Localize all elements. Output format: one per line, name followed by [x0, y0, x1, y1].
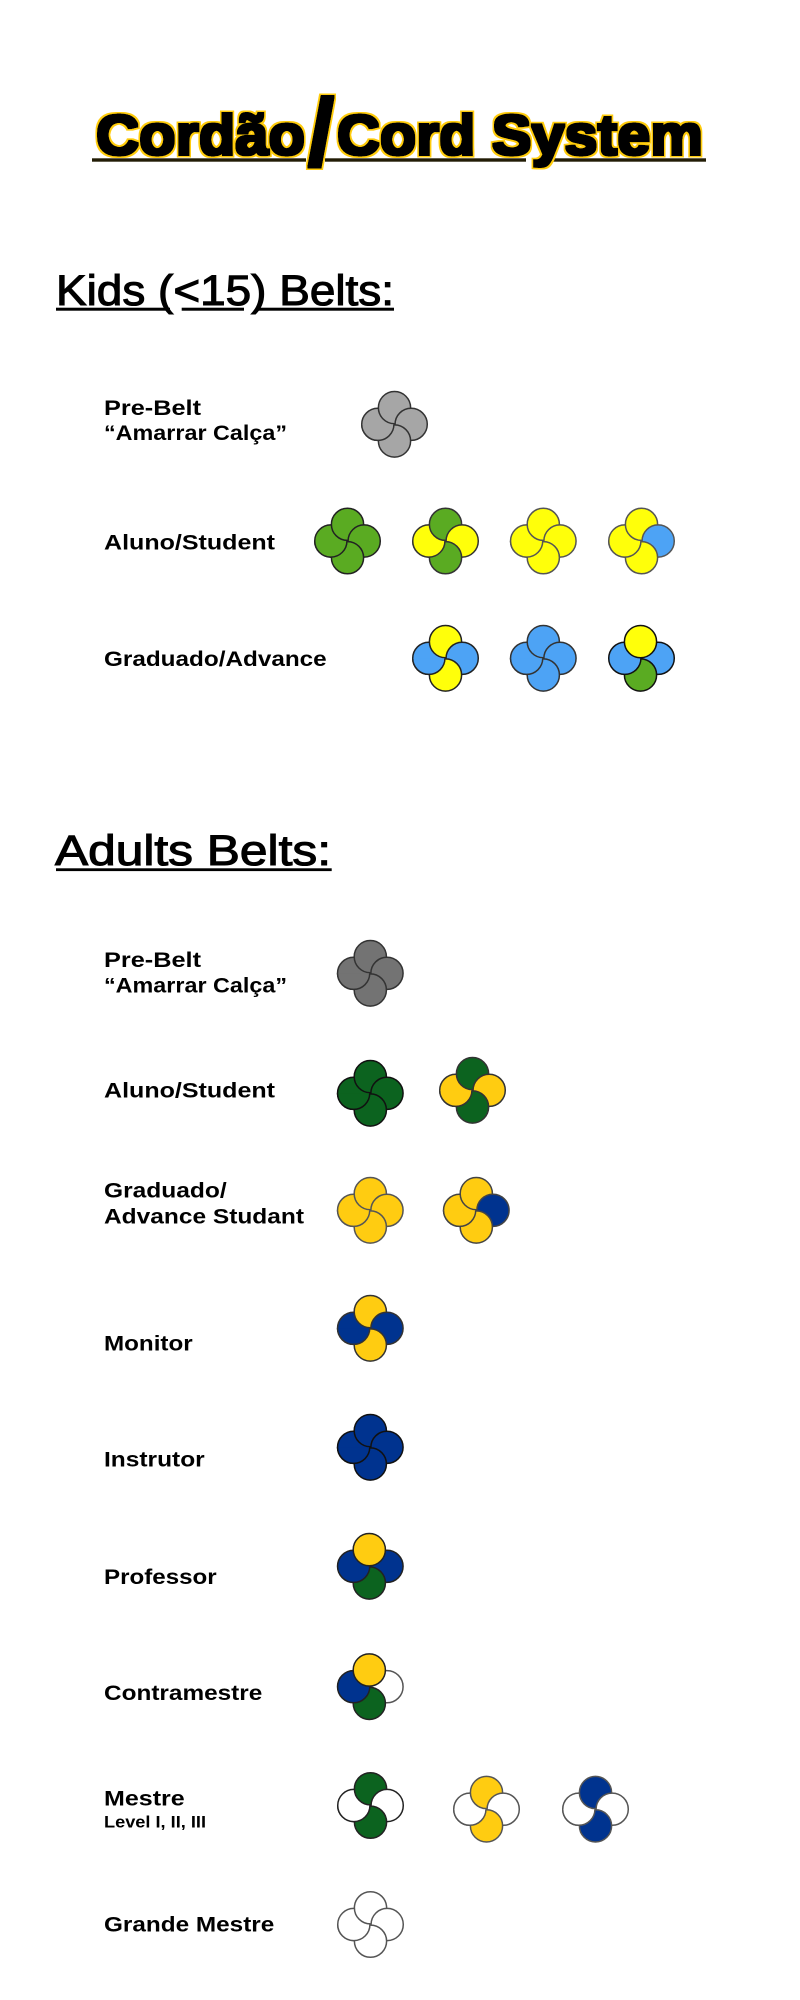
- label: adults graduado: Graduado/: [104, 1180, 227, 1203]
- knot: kids pre-belt grey: [362, 392, 427, 457]
- knot: mestre white and gold: [454, 1776, 519, 1842]
- knot: adults pre-belt dark grey: [338, 941, 403, 1006]
- label: contramestre: Contramestre: [104, 1682, 262, 1705]
- knot: kids green: [315, 508, 380, 574]
- knot: contramestre navy, gold, white and green: [338, 1654, 403, 1719]
- title: Cord System: [337, 104, 703, 168]
- knot: instrutor navy: [338, 1415, 403, 1480]
- knot: kids yellow: [511, 508, 576, 574]
- heading: kids belts: Kids (<15) Belts:: [56, 267, 394, 315]
- label: kids pre-belt: “Amarrar Calça”: [104, 422, 287, 445]
- knot: mestre white and navy: [563, 1776, 628, 1842]
- knot: kids yellow and green: [413, 508, 478, 574]
- knot: kids yellow and blue: [609, 508, 674, 574]
- label: adults pre-belt: Pre-Belt: [104, 949, 201, 972]
- knot: mestre white and green: [338, 1773, 403, 1838]
- knot: adults gold: [338, 1178, 403, 1243]
- knot: adults gold and green: [440, 1058, 505, 1123]
- knot: monitor navy and gold: [338, 1296, 403, 1361]
- label: grande mestre: Grande Mestre: [104, 1914, 274, 1937]
- label: kids pre-belt: Pre-Belt: [104, 397, 201, 420]
- knot: kids blue and yellow: [413, 626, 478, 691]
- label: mestre: Mestre: [104, 1787, 185, 1810]
- knot: professor navy, gold and green: [338, 1534, 403, 1599]
- label: adults pre-belt: [104, 949, 287, 998]
- title: Cordão: [96, 104, 305, 168]
- label: kids pre-belt: [104, 397, 287, 445]
- label: monitor: Monitor: [104, 1333, 193, 1356]
- label: adults graduado: [104, 1180, 304, 1228]
- label: adults graduado: Advance Studant: [104, 1205, 304, 1228]
- label: adults aluno: Aluno/Student: [104, 1080, 275, 1103]
- knot: adults green: [338, 1061, 403, 1126]
- label: instrutor: Instrutor: [104, 1449, 205, 1472]
- label: mestre: [104, 1787, 206, 1831]
- knot: kids blue, yellow and green: [609, 626, 674, 691]
- knot: adults gold and navy: [444, 1178, 509, 1243]
- title: /: [308, 80, 334, 186]
- heading: adults belts: Adults Belts:: [55, 827, 331, 875]
- label: professor: Professor: [104, 1566, 217, 1589]
- label: adults pre-belt: “Amarrar Calça”: [104, 974, 287, 998]
- knot: kids blue: [511, 626, 576, 691]
- label: kids aluno: Aluno/Student: [104, 531, 275, 554]
- label: kids graduado: Graduado/Advance: [104, 648, 327, 671]
- label: mestre: Level I, II, III: [104, 1812, 206, 1831]
- title: [92, 80, 706, 186]
- knot: grande mestre white: [338, 1892, 403, 1957]
